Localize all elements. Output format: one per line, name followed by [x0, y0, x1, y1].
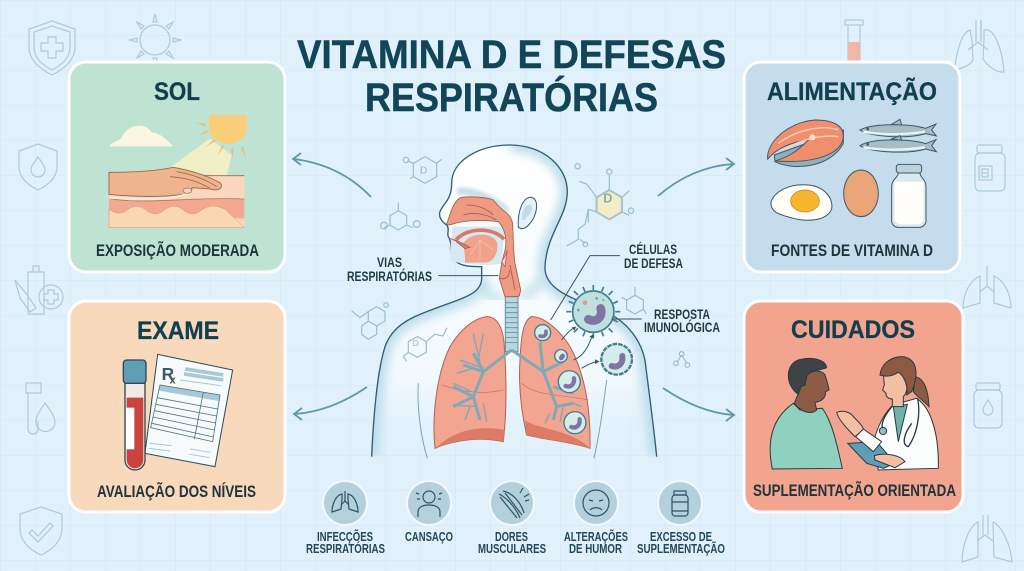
illustration: sun, cloud and skin: [108, 115, 247, 228]
central figure: respiratory system: [352, 145, 690, 458]
icon: background shield with drop: [19, 144, 57, 190]
label: vias respiratorias: [347, 255, 432, 284]
molecules: D: [420, 165, 427, 176]
panel: exame: [69, 301, 285, 512]
illustration: patient talking to doctor: [770, 357, 938, 470]
title: [297, 33, 726, 120]
panel: sol: [69, 62, 285, 272]
symptom: excesso de suplementacao: SUPLEMENTAÇÃO: [637, 541, 725, 556]
arrow: to exame: [294, 387, 367, 420]
symptom: infeccoes respiratorias: [306, 481, 385, 556]
symptom: excesso de suplementacao: EXCESSO DE: [650, 530, 712, 544]
illustration: blood tube and lab report: x: [169, 374, 176, 386]
icon: tired person: [416, 491, 442, 517]
icon: sad face: [583, 490, 609, 516]
trachea and bronchi: [453, 297, 582, 423]
icon: background shield top left: [29, 21, 75, 75]
illustration: vitamin D foods: [768, 119, 936, 227]
panel: cuidados: [744, 301, 963, 512]
symptom: alteracoes de humor: [564, 481, 628, 556]
symptom: alteracoes de humor: ALTERAÇÕES: [564, 529, 628, 544]
symptom: infeccoes respiratorias: INFECÇÕES: [317, 529, 373, 544]
illustration: blood tube and lab report: [123, 354, 233, 470]
icon: background flask: [845, 20, 863, 66]
caption: exame: AVALIAÇÃO DOS NÍVEIS: [97, 481, 256, 501]
arrow: to cuidados: [663, 388, 734, 421]
icon: lungs: [332, 491, 358, 512]
icon: background hand with bottle and plus: [15, 266, 63, 314]
lungs: [434, 317, 590, 448]
icon: background lungs right: [963, 266, 1011, 308]
panel: alimentacao: [744, 62, 960, 272]
heading: sol: SOL: [154, 78, 200, 106]
heading: cuidados: CUIDADOS: [791, 316, 915, 344]
label: resposta imunologica: IMUNOLÓGICA: [644, 320, 720, 335]
molecule: vitamin D highlighted: D: [603, 191, 612, 205]
icon: background lungs top right: [955, 20, 1004, 72]
caption: cuidados: SUPLEMENTAÇÃO ORIENTADA: [753, 480, 956, 500]
symptom: dores musculares: MUSCULARES: [478, 542, 546, 556]
title: VITAMINA D E DEFESAS: [297, 33, 726, 77]
icon: background lungs bottom right: [962, 515, 1012, 562]
icon: background jar: [975, 145, 1005, 191]
label: vias respiratorias: VIAS: [377, 255, 402, 270]
body silhouette: [372, 145, 657, 458]
airway: nasal cavity and throat: [447, 188, 537, 297]
icon: background jar lower: [974, 383, 1002, 428]
immune cells: [535, 285, 632, 434]
symptom: infeccoes respiratorias: RESPIRATÓRIAS: [306, 541, 385, 556]
icon: background shield with check: [20, 507, 62, 555]
label: celulas de defesa: CÉLULAS: [629, 242, 677, 257]
symptom: cansaco: CANSAÇO: [405, 530, 453, 544]
arrow: to alimentacao: [658, 158, 734, 196]
molecules: [352, 157, 690, 367]
label: vias respiratorias: RESPIRATÓRIAS: [347, 269, 432, 284]
caption: alimentacao: FONTES DE VITAMINA D: [771, 242, 933, 260]
icon: background test tube and drop: [26, 383, 55, 434]
icon: muscle: [499, 488, 529, 518]
label: celulas de defesa: DE DEFESA: [624, 256, 683, 271]
symptom: dores musculares: [478, 481, 546, 556]
symptom: cansaco: [405, 481, 453, 544]
leader lines: [438, 256, 642, 320]
molecule: vitamin D highlighted: [567, 164, 634, 247]
label: resposta imunologica: RESPOSTA: [654, 307, 710, 322]
caption: sol: EXPOSIÇÃO MODERADA: [96, 240, 259, 260]
illustration: blood tube and lab report: R: [162, 364, 175, 384]
heading: alimentacao: ALIMENTAÇÃO: [767, 76, 937, 106]
symptom: dores musculares: DORES: [495, 530, 528, 544]
symptom: excesso de suplementacao: [637, 481, 725, 556]
label: celulas de defesa: [624, 242, 683, 271]
molecule: vitamin D on shoulder: [403, 328, 447, 361]
icon: background sun: [129, 14, 181, 66]
label: resposta imunologica: [644, 307, 720, 335]
icon: supplement jar: [672, 491, 688, 516]
title: RESPIRATÓRIAS: [365, 74, 658, 120]
symptom: alteracoes de humor: DE HUMOR: [569, 542, 622, 556]
arrow: to sol: [293, 153, 371, 197]
molecule: vitamin D on shoulder: D: [413, 338, 419, 348]
heading: exame: EXAME: [137, 317, 219, 345]
